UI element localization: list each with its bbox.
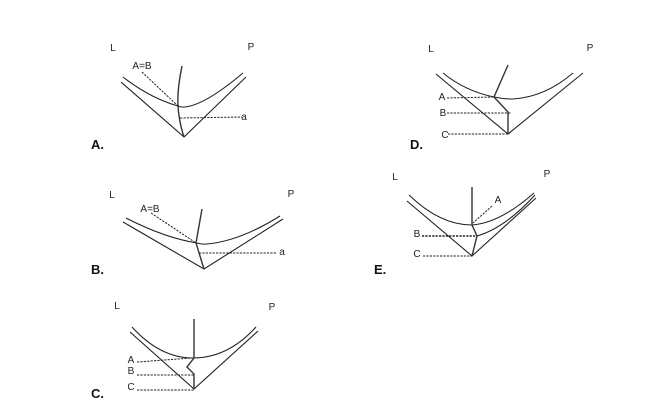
diagram A: L [110, 43, 116, 54]
diagram A: P [248, 42, 255, 53]
diagram C: P [269, 302, 276, 313]
diagram D: P [587, 43, 594, 54]
diagram B [91, 189, 295, 277]
diagram E: B [414, 229, 421, 240]
diagram E: E. [374, 262, 386, 277]
diagram B: a [279, 247, 285, 258]
diagram D: D. [410, 137, 423, 152]
diagram B: A=B [140, 204, 160, 215]
diagram D: C [441, 130, 449, 141]
diagram E [374, 169, 551, 277]
diagram B: L [109, 190, 115, 201]
diagram D: A [439, 92, 446, 103]
diagram A: A. [91, 137, 104, 152]
diagram C: C [127, 382, 135, 393]
diagram E: L [392, 172, 398, 183]
diagram E: P [544, 169, 551, 180]
diagram D: B [440, 108, 447, 119]
diagram C: A [128, 355, 135, 366]
diagram B: B. [91, 262, 104, 277]
diagram E: C [413, 249, 421, 260]
diagram A: A=B [132, 61, 152, 72]
diagram B: P [288, 189, 295, 200]
diagram A: a [241, 112, 247, 123]
diagram C: B [128, 366, 135, 377]
diagram C [91, 301, 276, 401]
diagram A [91, 42, 255, 152]
diagram C: L [114, 301, 120, 312]
diagram D: L [428, 44, 434, 55]
diagram D [410, 43, 594, 152]
diagram C: C. [91, 386, 104, 401]
diagram E: A [495, 195, 502, 206]
